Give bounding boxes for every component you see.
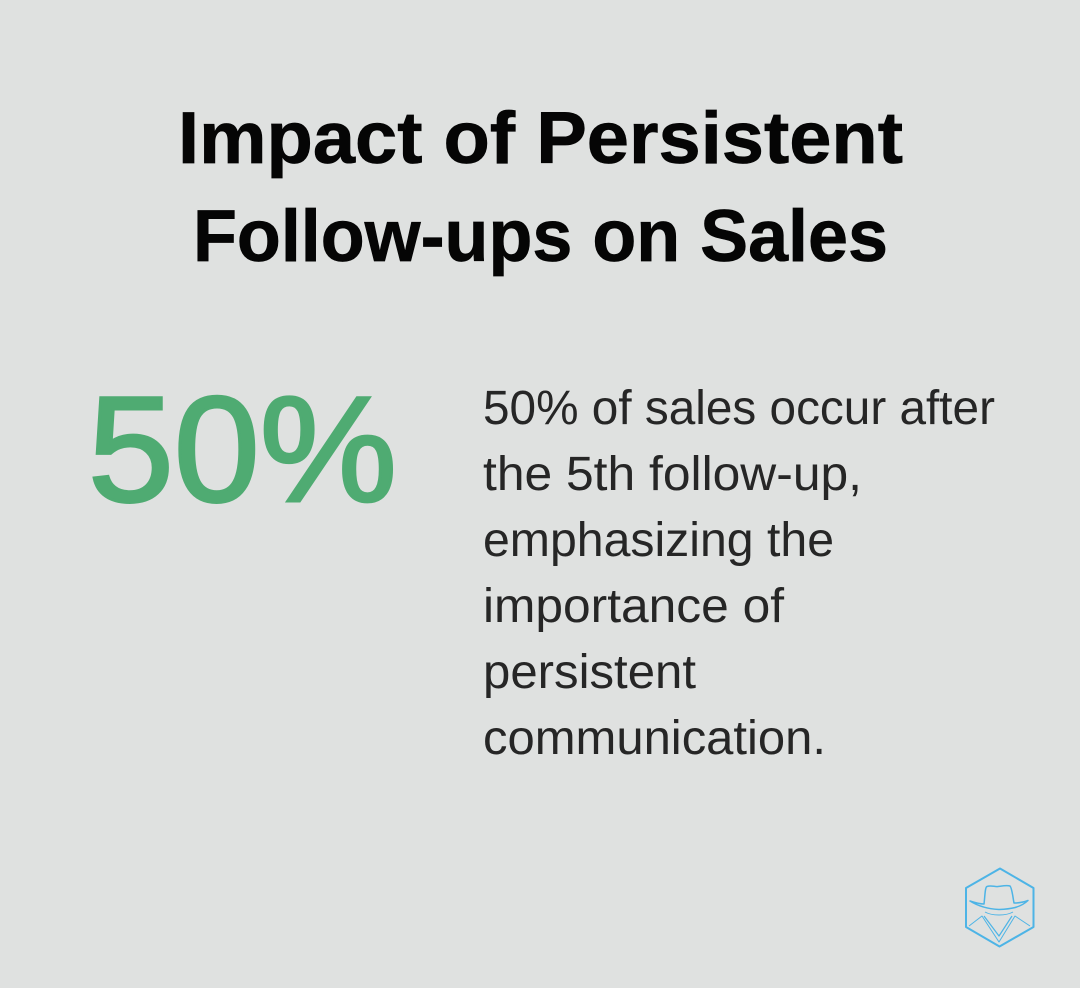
description text [483,382,995,765]
description text: the 5th follow-up, [483,448,862,501]
title: Impact of Persistent [178,98,903,179]
description text: 50% of sales occur after [483,382,995,435]
description text: emphasizing the [483,514,834,567]
description text: communication. [483,712,826,765]
icon: hexagon spy logo [966,868,1034,946]
title: Follow-ups on Sales [193,196,888,277]
big stat: 50%: 50% [88,365,397,533]
title [178,98,903,277]
description text: persistent [483,646,696,699]
description text: importance of [483,580,785,633]
